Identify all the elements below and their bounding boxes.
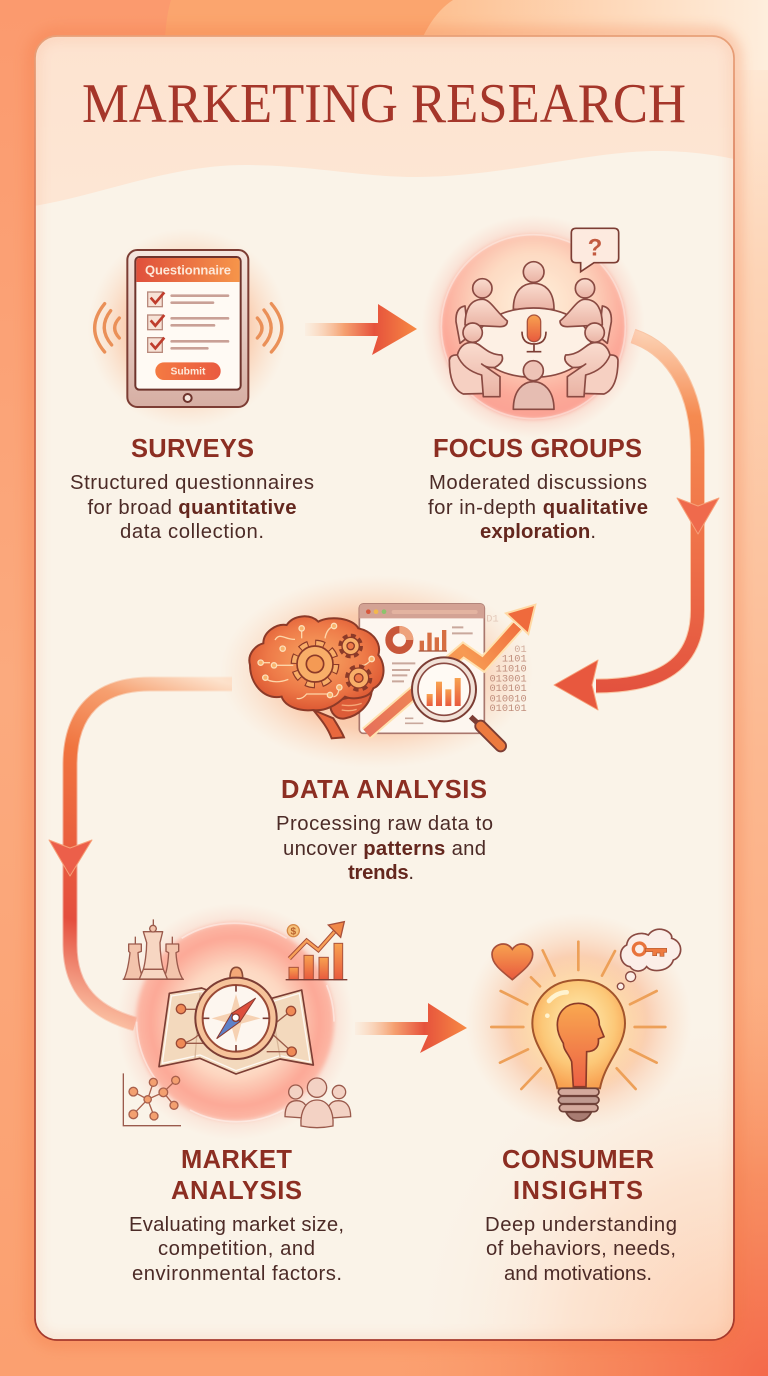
binary digits: 11010 xyxy=(496,664,527,676)
text: data analysis: trends. xyxy=(348,862,414,884)
heading: market analysis xyxy=(171,1146,302,1205)
chart top right xyxy=(287,925,299,937)
text: surveys: for broad quantitative xyxy=(88,497,296,519)
rising arrow xyxy=(367,626,517,733)
binary digits: 013001 xyxy=(489,673,527,685)
arrow: data analysis to market analysis xyxy=(49,684,232,1024)
compass xyxy=(230,967,243,978)
icon: focus group table xyxy=(422,215,645,438)
heading: consumer insights: CONSUMER xyxy=(502,1146,654,1174)
right-side seated people xyxy=(560,279,618,397)
chess pieces xyxy=(124,932,183,979)
bottom person xyxy=(523,361,543,381)
heart xyxy=(492,944,533,980)
icon: market analysis: $ xyxy=(291,927,297,938)
heading: consumer insights: INSIGHTS xyxy=(513,1177,643,1205)
text: market analysis: competition, and xyxy=(158,1238,315,1260)
top person xyxy=(523,262,544,282)
bulb base xyxy=(558,1088,599,1121)
binary digits: D1 xyxy=(486,613,499,625)
icon: survey tablet xyxy=(88,228,288,428)
text: consumer insights: of behaviors, needs, xyxy=(486,1238,676,1260)
map xyxy=(159,988,313,1074)
heading: market analysis: MARKET xyxy=(181,1146,292,1174)
head silhouette xyxy=(557,1003,604,1087)
arrow: market analysis to consumer insights xyxy=(355,1003,467,1053)
rays xyxy=(491,942,665,1089)
text: focus groups xyxy=(428,472,648,543)
brain xyxy=(313,710,344,738)
binary digits: 010101 xyxy=(489,703,527,715)
speech bubble xyxy=(571,228,619,272)
browser window xyxy=(359,604,484,733)
text: market analysis: environmental factors. xyxy=(132,1263,342,1285)
icon: survey tablet: Questionnaire xyxy=(145,262,231,277)
heading: data analysis: DATA ANALYSIS xyxy=(281,776,487,804)
title: MARKETING RESEARCH xyxy=(82,73,686,135)
binary digits: 010101 xyxy=(489,683,527,695)
text: surveys: data collection. xyxy=(120,521,264,543)
text: surveys xyxy=(70,472,314,543)
heading: focus groups: FOCUS GROUPS xyxy=(433,435,642,463)
heading: market analysis: ANALYSIS xyxy=(171,1177,302,1205)
heading: surveys: SURVEYS xyxy=(131,435,254,463)
thought cloud with key xyxy=(617,983,624,990)
text: focus groups: Moderated discussions xyxy=(429,472,647,494)
heading: consumer insights xyxy=(502,1146,654,1205)
text: consumer insights: and motivations. xyxy=(504,1263,652,1285)
icon: market analysis xyxy=(117,903,353,1140)
people group xyxy=(285,1078,351,1128)
text: data analysis xyxy=(276,813,493,884)
text: data analysis: Processing raw data to xyxy=(276,813,493,835)
left-side seated people xyxy=(449,279,507,397)
header band xyxy=(34,36,734,206)
network chart xyxy=(123,1073,181,1126)
text: focus groups: exploration. xyxy=(480,521,596,543)
bulb xyxy=(532,980,625,1088)
binary digits: 1101 xyxy=(502,654,527,666)
text: focus groups: for in-depth qualitative xyxy=(428,497,648,519)
icon: focus group table: ? xyxy=(588,234,602,261)
icon: survey tablet: Submit xyxy=(170,367,206,378)
arrow: surveys to focus groups xyxy=(305,304,417,355)
arrow: focus groups to data analysis xyxy=(554,336,719,710)
text: data analysis: uncover patterns and xyxy=(283,838,486,860)
icon: data analysis xyxy=(220,575,535,768)
microphone xyxy=(527,315,541,342)
text: market analysis: Evaluating market size, xyxy=(129,1214,344,1236)
binary digits: 01 xyxy=(514,644,527,656)
text: market analysis xyxy=(129,1214,344,1285)
text: consumer insights: Deep understanding xyxy=(485,1214,677,1236)
icon: light bulb with head xyxy=(465,913,692,1130)
magnifier xyxy=(471,717,480,725)
binary digits: 010010 xyxy=(489,693,527,705)
text: consumer insights xyxy=(485,1214,677,1285)
text: surveys: Structured questionnaires xyxy=(70,472,314,494)
binary digits xyxy=(486,613,527,715)
gears xyxy=(294,636,370,689)
table xyxy=(476,308,591,377)
